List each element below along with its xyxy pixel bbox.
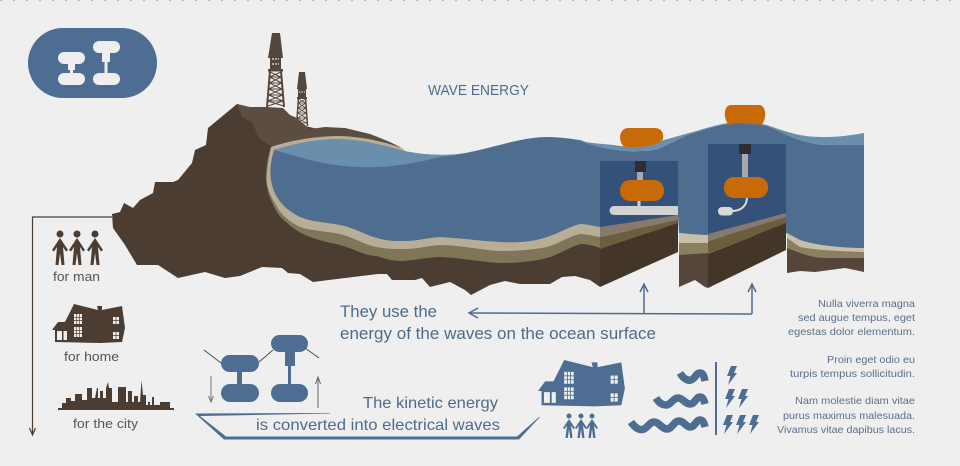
orange surface float right	[725, 105, 765, 125]
caption: kinetic energy: is converted into electrical waves	[256, 417, 500, 434]
right text block: egestas dolor elementum.	[788, 326, 915, 338]
lighter hilltop	[237, 104, 400, 150]
light wave surface left	[274, 139, 470, 167]
tray bracket	[195, 413, 540, 440]
right text block: Vivamus vitae dapibus lacus.	[777, 424, 915, 436]
right text block: sed augue tempus, eget	[798, 312, 915, 324]
second generator machinery	[718, 144, 768, 216]
right text block	[777, 298, 915, 436]
light sand layer	[267, 136, 600, 251]
icon: house brown	[52, 304, 125, 343]
icon: three people brown	[52, 230, 103, 265]
arrow: float moves up	[316, 377, 320, 408]
dark sediment layer	[266, 148, 600, 263]
ocean basin cross-section	[266, 136, 600, 263]
right text block: Nam molestie diam vitae	[795, 395, 915, 407]
caption: kinetic energy	[256, 395, 500, 434]
icon: three people blue	[563, 414, 598, 438]
ocean water right section	[570, 122, 864, 248]
cutaway panel: second generator	[708, 144, 786, 288]
divider between waves and bolts	[715, 362, 717, 435]
seabed segment on the right	[787, 233, 864, 273]
first generator machinery	[610, 161, 678, 215]
caption: wave energy	[340, 302, 656, 343]
icon: city skyline	[58, 380, 174, 410]
label: for man: for man	[53, 269, 100, 284]
diagram: generators in motion	[204, 335, 320, 408]
power line arrow to consumers	[30, 217, 112, 435]
right text block: Proin eget odio eu	[827, 354, 915, 366]
icon: house blue	[538, 360, 625, 406]
title: WAVE ENERGY	[428, 82, 529, 99]
caption: kinetic energy: The kinetic energy	[363, 395, 498, 412]
main water body	[270, 137, 600, 242]
caption: wave energy: energy of the waves on the ocean surface	[340, 324, 656, 343]
icon: short oil derrick	[296, 72, 308, 126]
right text block: purus maximus malesuada.	[783, 410, 915, 422]
badge: wave generators icon	[28, 28, 157, 98]
caption: wave energy: They use the	[340, 302, 437, 321]
icon: tall oil derrick	[267, 33, 284, 107]
flow arrows from waves	[469, 284, 756, 318]
label: for home: for home	[64, 349, 119, 364]
arrow: float moves down	[208, 376, 214, 402]
seabed segment between the two cutaways	[679, 233, 708, 288]
cliff and seabed rock	[112, 104, 600, 295]
cutaway panel: first generator	[600, 161, 678, 287]
right text block: turpis tempus sollicitudin.	[790, 368, 915, 380]
icon: three rows of waves	[631, 373, 705, 430]
icon: lightning bolts	[723, 366, 759, 434]
orange surface float left	[620, 128, 663, 147]
right text block: Nulla viverra magna	[818, 298, 915, 310]
light wave surface right	[570, 122, 864, 151]
label: for the city: for the city	[73, 416, 139, 431]
